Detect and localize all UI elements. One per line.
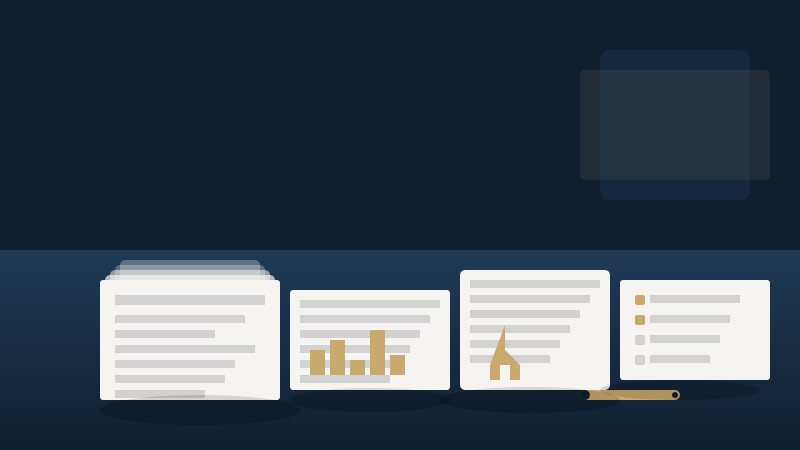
text lines	[300, 300, 440, 383]
contact shadows over documents and pen	[100, 380, 760, 425]
church document	[460, 270, 610, 390]
sheet	[290, 290, 450, 390]
sheet	[620, 280, 770, 380]
front sheet	[100, 280, 280, 400]
item lines	[650, 295, 740, 363]
chart document	[290, 290, 450, 390]
text lines	[115, 295, 265, 398]
pen	[580, 390, 680, 400]
text lines	[470, 280, 600, 363]
sheet	[460, 270, 610, 390]
unchecked items	[635, 335, 645, 365]
window panels	[580, 50, 770, 200]
bar chart	[310, 330, 405, 375]
checked items	[635, 295, 645, 325]
shadows under documents	[100, 380, 760, 425]
icon: church	[490, 325, 520, 380]
stacked back sheets	[105, 260, 275, 395]
document stack	[100, 260, 280, 400]
background wall	[0, 0, 800, 250]
desk surface	[0, 250, 800, 450]
checklist document	[620, 280, 770, 380]
